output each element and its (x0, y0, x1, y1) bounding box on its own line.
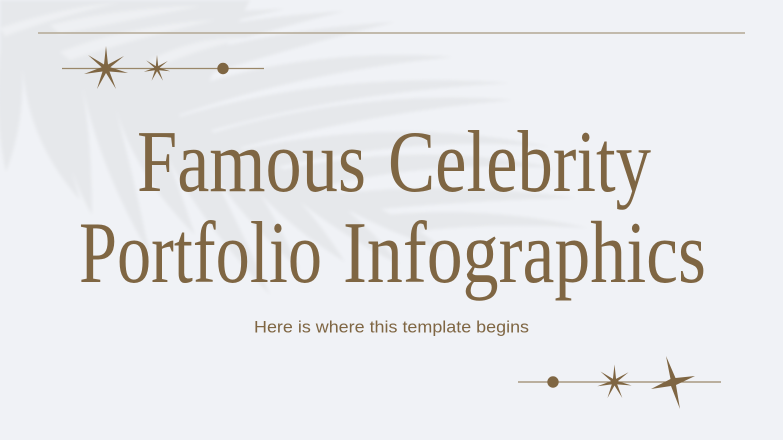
icon: large seven-point star (84, 46, 128, 89)
title word: Infographics: Infographics (343, 205, 706, 302)
icon: dot (547, 376, 559, 388)
icon: seven-point star (597, 364, 632, 398)
bottom ornament: dot and stars on a line (518, 356, 721, 409)
subtitle: Here is where this template begins (254, 318, 529, 336)
title word: Famous: Famous (137, 114, 366, 211)
icon: small seven-point star (144, 55, 170, 81)
top ornament: stars and dot on a line (62, 46, 264, 89)
title word: Portfolio: Portfolio (79, 205, 322, 302)
icon: four-point star (651, 356, 695, 409)
background palm leaf (0, 0, 588, 295)
top rule (38, 32, 745, 34)
icon: dot (217, 63, 229, 74)
title word: Celebrity: Celebrity (388, 114, 651, 211)
title (79, 114, 706, 302)
